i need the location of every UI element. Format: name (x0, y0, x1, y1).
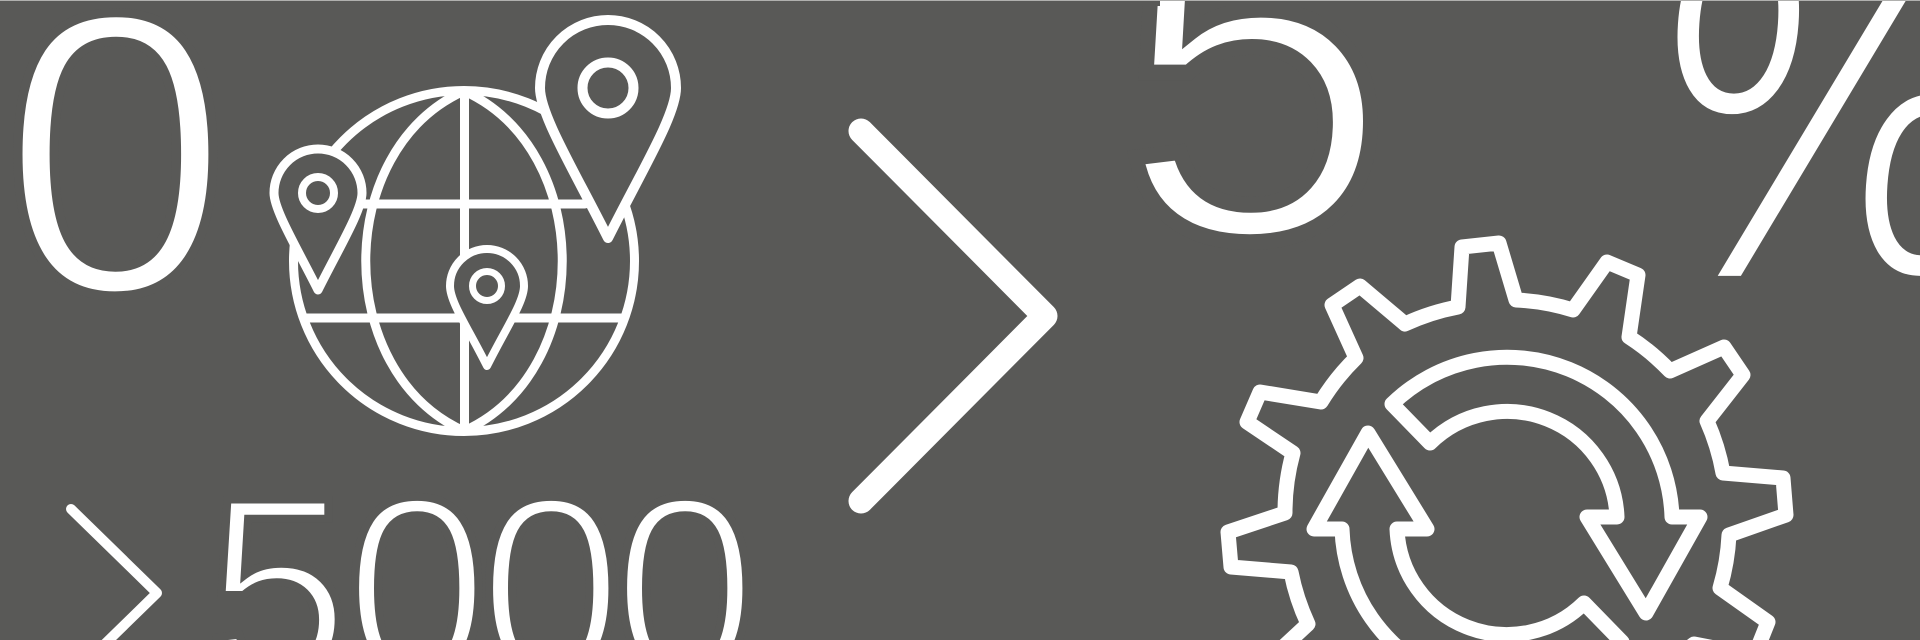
globe (294, 90, 634, 432)
arrow: lower clockwise (1314, 433, 1622, 640)
arrow: upper clockwise (1392, 357, 1700, 613)
large chevron: greater-than sign (861, 131, 1045, 501)
small chevron: greater-than sign (71, 509, 157, 640)
icon: globe with location pins (274, 20, 676, 432)
pin: centre (450, 249, 524, 366)
icon: gear with circular arrows (1228, 243, 1786, 640)
pin: left (274, 149, 362, 290)
gear outline (1228, 243, 1786, 640)
value: greater than 5000 (71, 443, 756, 640)
pin: top right (540, 20, 676, 238)
